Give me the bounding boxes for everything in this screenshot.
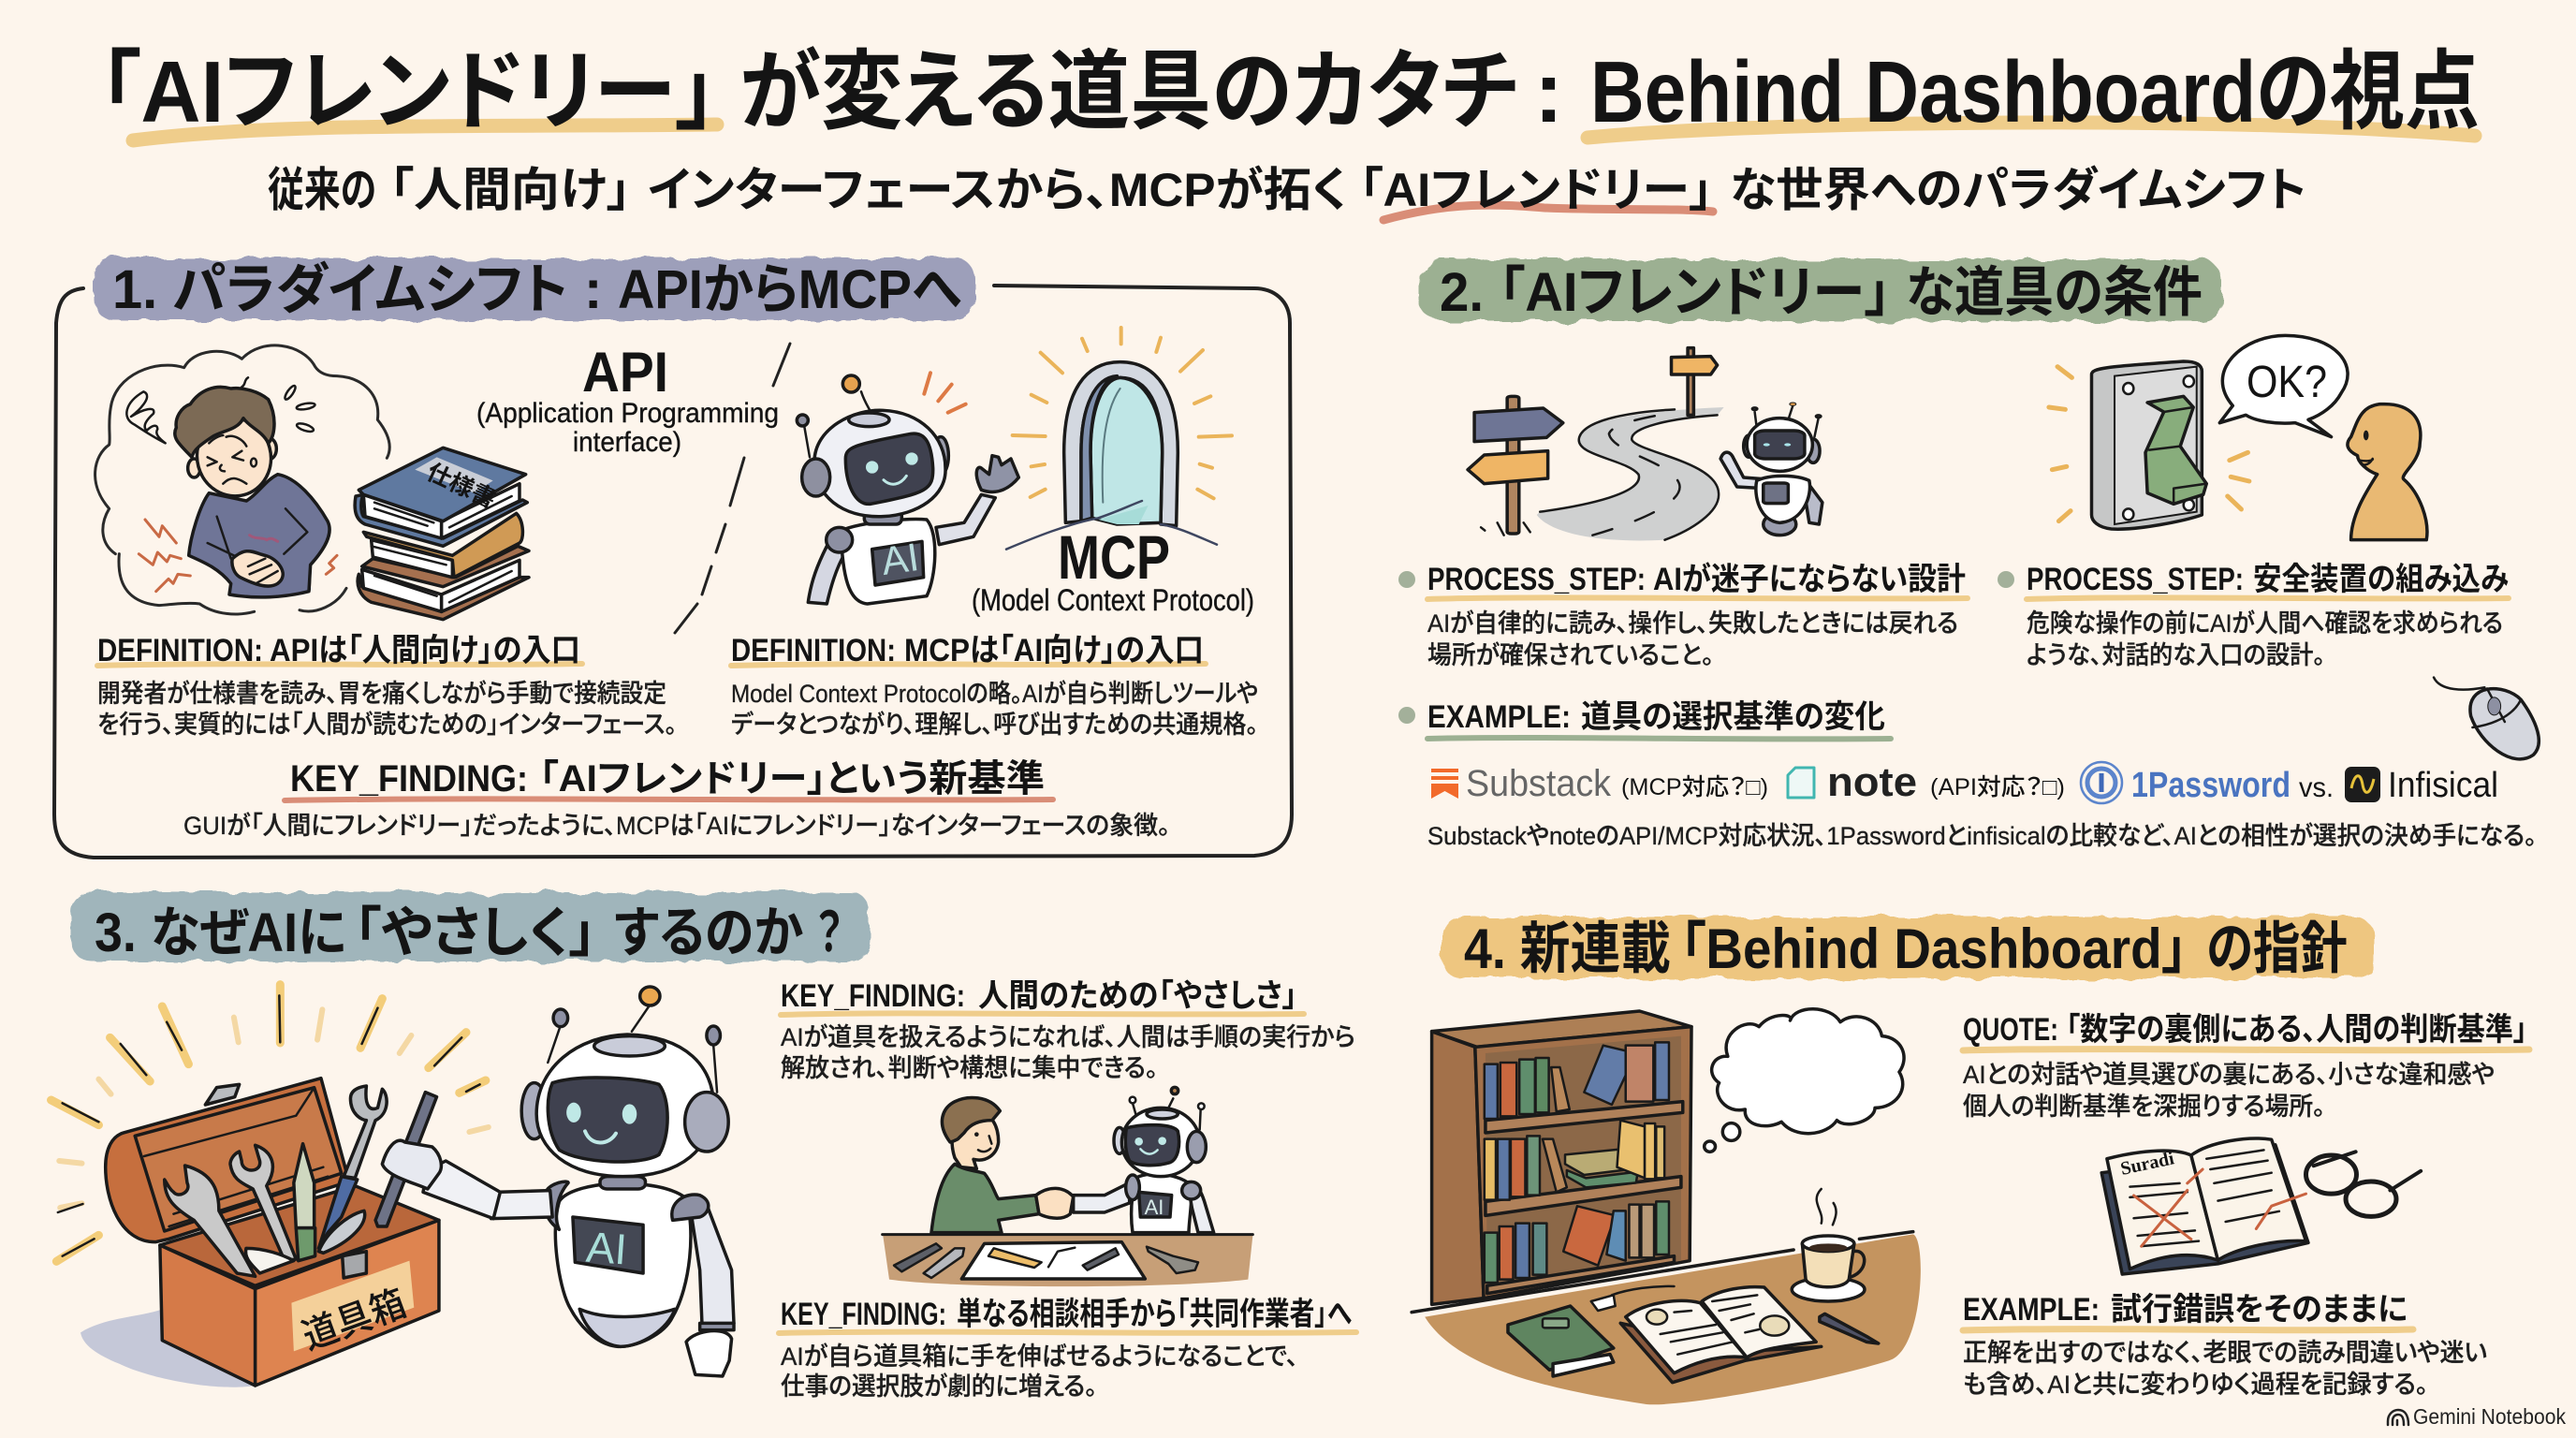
quote: 「数字の裏側にある、人間の判断基準」 xyxy=(2066,1012,2527,1048)
section 2 heading: な道具の条件 xyxy=(1906,262,2203,323)
Substack MCP status: (MCP対応？□) xyxy=(1621,774,1768,800)
AI chest label: AI xyxy=(879,535,921,583)
illustration: safety switch and person asking OK xyxy=(2049,335,2427,540)
process step: safety: 危険な操作の前にAIが人間へ確認を求められる xyxy=(2027,609,2503,638)
versus: vs. xyxy=(2299,772,2334,803)
example: trial and error: EXAMPLE: xyxy=(1963,1292,2100,1328)
MCP label: MCP xyxy=(1058,522,1170,592)
illustration: toolbox and robot xyxy=(51,985,734,1387)
illustration: robot waving at MCP door xyxy=(797,328,1232,604)
process step: AI not lost: 場所が確保されていること。 xyxy=(1427,641,1714,669)
definition: MCP: MCPは「AI向け」の入口 xyxy=(904,633,1204,668)
section 4 heading: 4. 新連載 xyxy=(1464,917,1671,980)
quote: QUOTE: xyxy=(1963,1012,2058,1048)
key finding: AI friendly xyxy=(183,758,1170,840)
example: selection criteria xyxy=(1398,699,1891,739)
illustration: stressed developer with manuals xyxy=(95,345,529,620)
section 2 heading: 「AIフレンドリー」 xyxy=(1499,262,1891,323)
section 3 heading band xyxy=(71,892,871,961)
process step: AI not lost: AIが自律的に読み、操作し、失敗したときには戻れる xyxy=(1427,609,1958,638)
toolbox label: 道具箱 xyxy=(297,1283,412,1358)
section 2 heading xyxy=(1440,262,2203,323)
definition: API: DEFINITION: xyxy=(97,633,263,668)
manual title on book cover: 仕様書 xyxy=(422,459,500,513)
handwritten note on book: Suradi xyxy=(2118,1148,2176,1180)
example: selection criteria: EXAMPLE: xyxy=(1427,699,1571,735)
API label: API xyxy=(582,341,668,404)
example: trial and error: も含め、AIと共に変わりゆく過程を記録する。 xyxy=(1963,1371,2428,1399)
definition: MCP: DEFINITION: xyxy=(731,633,896,668)
section 3 heading: するのか xyxy=(614,902,803,963)
Infisical name: Infisical xyxy=(2388,766,2498,805)
definition: MCP: Model Context Protocolの略。AIが自ら判断しツールや xyxy=(731,680,1258,708)
section 4 heading band xyxy=(1442,917,2373,978)
robot chest AI label: AI xyxy=(585,1223,628,1273)
example description: SubstackやnoteのAPI/MCP対応状況、1Passwordとinfisicalの比較など、AIとの相性が選択の決め手になる。 xyxy=(1427,822,2537,850)
section 3 heading: 3. なぜAIに xyxy=(95,902,346,963)
definition: API xyxy=(97,633,677,739)
definition: API: APIは「人間向け」の入口 xyxy=(270,633,580,668)
subtitle xyxy=(268,164,2306,220)
definition: API: 開発者が仕様書を読み、胃を痛くしながら手動で接続設定 xyxy=(97,680,666,708)
panel: section 3 why xyxy=(51,892,1356,1401)
key finding: kindness for humans xyxy=(781,978,1355,1082)
handshake robot chest label: AI xyxy=(1145,1196,1164,1219)
subtitle: な世界へのパラダイムシフト xyxy=(1730,164,2306,216)
example: selection criteria: 道具の選択基準の変化 xyxy=(1581,699,1885,735)
process step: AI not lost xyxy=(1398,561,1968,669)
quote: 個人の判断基準を深掘りする場所。 xyxy=(1963,1093,2325,1121)
quote xyxy=(1963,1012,2529,1121)
section 1 heading: APIからMCPへ xyxy=(618,259,961,320)
icon: note xyxy=(1788,768,1814,798)
API expansion: interface) xyxy=(573,427,681,458)
example: trial and error xyxy=(1963,1292,2487,1399)
example: trial and error: 試行錯誤をそのままに xyxy=(2111,1292,2408,1328)
note API status: (API対応？□) xyxy=(1930,774,2065,800)
illustration: bookshelf, thought bubble and desk xyxy=(1412,1009,1921,1404)
process step: safety: 安全装置の組み込み xyxy=(2253,562,2509,597)
key finding: kindness for humans: KEY_FINDING: xyxy=(781,978,965,1014)
key finding: kindness for humans: 人間のための「やさしさ」 xyxy=(978,978,1297,1014)
key finding: AI friendly: 「AIフレンドリー」という新基準 xyxy=(539,758,1045,800)
subtitle: 「AIフレンドリー」 xyxy=(1359,164,1713,216)
section 2 heading: 2. xyxy=(1440,262,1484,323)
section 1 heading xyxy=(112,259,961,320)
panel: section 4 new series xyxy=(1412,917,2529,1404)
key finding: kindness for humans: AIが道具を扱えるようになれば、人間は手順の実行から xyxy=(781,1023,1355,1051)
icon: 1Password xyxy=(2081,762,2122,803)
section 4 heading: 「Behind Dashboard」 xyxy=(1680,917,2188,980)
key finding: collaborator: 単なる相談相手から「共同作業者」へ xyxy=(957,1297,1352,1332)
quote: AIとの対話や道具選びの裏にある、小さな違和感や xyxy=(1963,1061,2495,1089)
divider slash xyxy=(675,344,790,633)
section 2 heading band xyxy=(1419,259,2222,321)
key finding: collaborator: AIが自ら道具箱に手を伸ばせるようになることで、 xyxy=(781,1343,1298,1371)
panel: section 1 paradigm shift xyxy=(54,258,1292,858)
illustration: marked-up book and glasses xyxy=(2101,1138,2421,1274)
Substack name: Substack xyxy=(1466,763,1612,804)
icon: computer mouse xyxy=(2434,678,2539,759)
process step: AI not lost: AIが迷子にならない設計 xyxy=(1653,561,1966,597)
key finding: collaborator: 仕事の選択肢が劇的に増える。 xyxy=(781,1372,1097,1401)
section 3 heading xyxy=(95,902,842,963)
speech text OK?: OK? xyxy=(2247,358,2327,407)
title: 「AIフレンドリー」 xyxy=(99,43,717,140)
process step: AI not lost: PROCESS_STEP: xyxy=(1427,562,1646,597)
1Password name: 1Password xyxy=(2131,766,2291,805)
illustration: human and robot handshake at table xyxy=(883,1087,1252,1286)
API expansion xyxy=(476,398,779,458)
section 1 heading: 1. パラダイムシフト xyxy=(112,259,568,320)
section 4 heading: の指針 xyxy=(2206,917,2348,980)
section 4 heading xyxy=(1464,917,2348,980)
logo row xyxy=(1431,759,2498,805)
key finding: AI friendly: KEY_FINDING: xyxy=(290,758,528,800)
icon: Substack xyxy=(1431,769,1458,799)
key finding: collaborator xyxy=(779,1297,1356,1401)
footer brand: Gemini Notebook xyxy=(2413,1404,2566,1429)
process step: safety xyxy=(1998,562,2509,669)
illustration: road with signposts and robot xyxy=(1468,348,1822,540)
section 3 heading: 「やさしく」 xyxy=(354,902,596,963)
MCP expansion: (Model Context Protocol) xyxy=(972,583,1254,617)
panel frame xyxy=(54,286,1292,858)
title: が変える道具のカタチ xyxy=(739,43,1518,140)
title: : xyxy=(1534,43,1563,140)
section 3 heading: ？ xyxy=(816,902,842,963)
definition: API: を行う、実質的には「人間が読むための」インターフェース。 xyxy=(97,711,677,739)
subtitle: 「人間向け」 xyxy=(389,164,631,216)
section 1 heading band xyxy=(94,258,975,320)
definition: MCP: データとつながり、理解し、呼び出すための共通規格。 xyxy=(731,711,1258,739)
process step: safety: PROCESS_STEP: xyxy=(2027,562,2244,597)
process step: safety: ような、対話的な入口の設計。 xyxy=(2027,641,2325,669)
key finding: kindness for humans: 解放され、判断や構想に集中できる。 xyxy=(781,1054,1158,1082)
example: trial and error: 正解を出すのではなく、老眼での読み間違いや迷い xyxy=(1963,1339,2487,1367)
subtitle: インターフェースから、MCPが拓く xyxy=(648,164,1347,216)
API expansion: (Application Programming xyxy=(476,398,779,429)
definition: MCP xyxy=(731,633,1258,739)
icon: Infisical xyxy=(2345,767,2380,802)
panel: section 2 conditions xyxy=(1398,259,2539,850)
subtitle: 従来の xyxy=(268,164,376,216)
key finding: AI friendly: GUIが「人間にフレンドリー」だったように、MCPは「AIにフレンドリー」なインターフェースの象徴。 xyxy=(183,812,1170,840)
key finding: collaborator: KEY_FINDING: xyxy=(781,1297,946,1332)
note name: note xyxy=(1827,759,1917,805)
title xyxy=(99,43,2480,140)
section 1 heading: : xyxy=(584,259,602,320)
